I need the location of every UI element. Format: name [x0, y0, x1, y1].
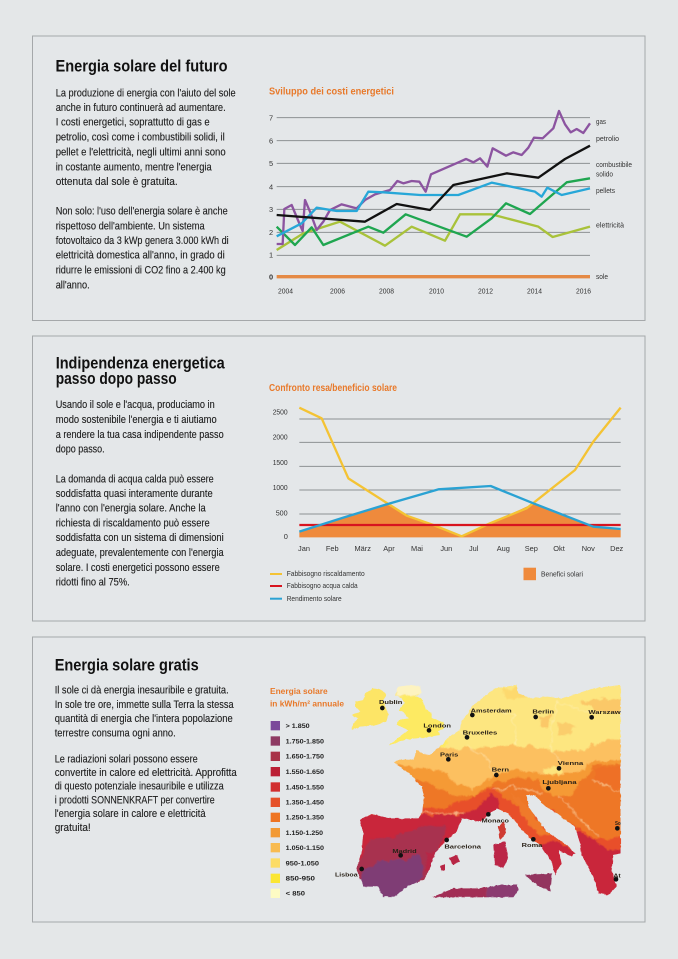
heading: indipendenza energetica: passo dopo passo [56, 369, 177, 388]
text block: costi energetici: all'anno. [56, 279, 90, 291]
x axis labels: Mai [411, 544, 423, 553]
city labels: Madrid [392, 849, 417, 855]
x axis labels: 2004 [278, 286, 293, 296]
text block: acqua calda e riscaldamento: dopo passo. [56, 444, 105, 456]
legend labels: 1.350-1.450 [286, 800, 325, 807]
legend labels: 1.050-1.150 [286, 845, 325, 852]
y axis labels: 7 [269, 114, 273, 122]
x axis labels: Dez [610, 544, 624, 553]
x axis labels: Apr [383, 544, 395, 553]
text block: acqua calda e riscaldamento: a rendere la tua casa indipendente passo [56, 429, 224, 441]
city labels: Paris [440, 752, 458, 758]
legend: Benefici solari [541, 570, 583, 578]
city labels: London [423, 723, 452, 729]
text block: costi energetici: in costante aumento, mentre l'energia [56, 161, 212, 173]
city labels: Warszaw [588, 710, 621, 716]
series: gas [277, 111, 590, 244]
series: petrolio [277, 146, 590, 222]
series labels: gas [596, 117, 606, 126]
legend labels: 1.250-1.350 [286, 815, 325, 822]
legend: Fabbisogno acqua calda [287, 581, 358, 590]
legend title [270, 686, 344, 709]
y axis labels: 1 [269, 250, 273, 260]
city labels: Bruxelles [463, 730, 497, 736]
text block: acqua calda e riscaldamento: solare. I costi energetici possono essere [56, 562, 220, 574]
text block: acqua calda e riscaldamento: adeguate, prevalentemente con l'energia [56, 547, 224, 559]
panel: energia solare gratis [32, 637, 645, 922]
legend labels: 1.450-1.550 [286, 784, 325, 791]
x axis labels: März [354, 544, 371, 553]
legend labels: 850-950 [286, 876, 316, 883]
text block: costi energetici: ottenuta dal sole è gratuita. [56, 176, 178, 188]
text block: energia inesauribile: terrestre consuma ogni anno. [55, 727, 176, 739]
text block: energia inesauribile: i prodotti SONNENKRAFT per convertire [55, 794, 215, 806]
text block: costi energetici: ridurre le emissioni di CO2 fino a 2.400 kg [56, 265, 226, 277]
x axis labels: Jan [298, 544, 310, 553]
city labels: Berlin [532, 709, 555, 715]
city labels: Lisboa [335, 872, 359, 878]
text block: costi energetici: Non solo: l'uso dell'energia solare è anche [56, 206, 228, 218]
y axis labels: 2000 [273, 432, 288, 442]
text block: costi energetici: pellet e l'elettricità, negli ultimi anni sono [56, 146, 226, 158]
x axis labels [278, 286, 591, 296]
text block: energia inesauribile: quantità di energia che l'intera popolazione [55, 713, 233, 725]
text block: costi energetici: petrolio, così come i combustibili solidi, il [56, 131, 225, 143]
y axis labels [269, 114, 273, 282]
x axis labels: Jul [469, 544, 479, 553]
y axis labels: 3 [269, 205, 273, 214]
y axis labels: 6 [269, 136, 273, 146]
series: pellets [277, 183, 590, 236]
text block: energia inesauribile: convertite in calore ed elettricità. Approfitta [55, 767, 237, 779]
x axis labels: Aug [497, 544, 510, 553]
chart title: confronto resa/beneficio solare: Confronto resa/beneficio solare [269, 382, 397, 394]
legend labels [286, 723, 325, 898]
text block: acqua calda e riscaldamento: modo sostenibile l'energia e ti aiutiamo [56, 414, 217, 426]
series labels: sole [596, 272, 608, 281]
legend labels: 1.150-1.250 [286, 830, 324, 837]
text block: costi energetici: anche in futuro continuerà ad aumentare. [56, 102, 226, 114]
x axis labels [298, 544, 624, 553]
y axis labels: 0 [269, 272, 273, 282]
text block: costi energetici: rispettoso dell'ambiente. Un sistema [56, 220, 205, 232]
legend: Fabbisogno riscaldamento [287, 569, 365, 578]
legend labels: 1.650-1.750 [286, 754, 325, 761]
city labels: Amsterdam [471, 708, 512, 714]
text block: acqua calda e riscaldamento [56, 399, 224, 589]
legend swatches [271, 721, 280, 898]
series labels: combustibile [596, 160, 632, 169]
x axis labels: Feb [326, 544, 339, 553]
heading: indipendenza energetica [56, 353, 225, 388]
legend: Rendimento solare [287, 594, 342, 603]
legend labels: 1.550-1.650 [286, 769, 325, 776]
legend labels: 1.750-1.850 [286, 738, 325, 745]
y axis labels: 2 [269, 228, 273, 237]
x axis labels: 2014 [527, 286, 542, 296]
y axis labels: 4 [269, 182, 273, 192]
series labels: solido [596, 170, 613, 178]
map legend [270, 686, 344, 898]
text block: acqua calda e riscaldamento: l'anno con l'energia solare. Anche la [56, 503, 206, 515]
legend title: in kWh/m² annuale [270, 699, 344, 709]
y axis labels: 1500 [273, 458, 288, 467]
series: fabbisogno acqua calda [299, 521, 621, 528]
city labels: Dublin [379, 700, 403, 706]
x axis labels: Okt [553, 544, 565, 553]
text block: acqua calda e riscaldamento: soddisfatta quasi interamente durante [56, 488, 213, 500]
y axis labels: 5 [269, 159, 273, 168]
series labels: petrolio [596, 134, 619, 143]
text block: costi energetici [56, 87, 236, 291]
legend labels: > 1.850 [286, 723, 310, 730]
city labels: Roma [522, 843, 543, 849]
text block: energia inesauribile: gratuita! [55, 822, 91, 834]
text block: energia inesauribile: Il sole ci dà energia inesauribile e gratuita. [55, 685, 229, 697]
y axis labels [273, 408, 288, 541]
text block: acqua calda e riscaldamento: Usando il sole e l'acqua, produciamo in [56, 399, 215, 411]
city labels [335, 700, 621, 882]
heading: energia solare del futuro: Energia solare del futuro [56, 56, 228, 76]
text block: energia inesauribile: In sole tre ore, immette sulla Terra la stessa [55, 699, 234, 711]
x axis labels: 2016 [576, 286, 591, 296]
series: elettricità [277, 214, 590, 250]
city labels: At [613, 873, 621, 879]
city labels: Bern [492, 768, 510, 774]
line chart: confronto resa/beneficio [270, 408, 624, 603]
text block: energia inesauribile: l'energia solare in calore e elettricità [55, 808, 206, 820]
city labels: Barcelona [444, 844, 482, 850]
series labels: pellets [596, 186, 615, 195]
city labels: Monaco [482, 818, 510, 824]
legend labels: 950-1.050 [286, 860, 320, 867]
text block: costi energetici: I costi energetici, soprattutto di gas e [56, 117, 210, 129]
series labels [596, 117, 632, 281]
area: benefici solari [299, 503, 621, 537]
x axis labels: Sep [525, 544, 538, 553]
text block: costi energetici: elettricità domestica all'anno, in grado di [56, 250, 225, 262]
text block: acqua calda e riscaldamento: La domanda di acqua calda può essere [56, 473, 214, 485]
text block: costi energetici: fotovoltaico da 3 kWp genera 3.000 kWh di [56, 235, 229, 247]
legend title: Energia solare [270, 686, 328, 696]
text block: acqua calda e riscaldamento: soddisfatta con un sistema di dimensioni [56, 532, 224, 544]
city labels: So [615, 821, 621, 827]
y axis labels: 2500 [273, 408, 288, 416]
map: europe solar irradiation [335, 677, 627, 907]
legend labels: < 850 [286, 891, 306, 898]
text block: acqua calda e riscaldamento: ridotti fino al 75%. [56, 577, 130, 589]
heading: energia solare gratis: Energia solare gratis [55, 656, 199, 675]
y axis labels: 1000 [273, 483, 288, 492]
x axis labels: 2012 [478, 286, 493, 296]
y axis labels: 0 [284, 532, 288, 541]
panel: indipendenza energetica [32, 336, 645, 621]
legend [270, 568, 583, 603]
x axis labels: 2006 [330, 286, 345, 296]
series: combustibile solido [277, 178, 590, 245]
city labels: Ljubljana [542, 780, 578, 786]
series labels: elettricità [596, 220, 625, 230]
y axis labels: 500 [276, 508, 288, 518]
x axis labels: Nov [582, 544, 595, 553]
chart title: sviluppo dei costi energetici: Sviluppo dei costi energetici [269, 86, 394, 98]
series: sole [277, 272, 590, 282]
city labels: Vienna [558, 761, 585, 767]
series: fabbisogno riscaldamento [299, 408, 621, 536]
text block: acqua calda e riscaldamento: richiesta di riscaldamento può essere [56, 517, 210, 529]
x axis labels: 2008 [379, 286, 394, 296]
x axis labels: 2010 [429, 286, 444, 296]
heading: indipendenza energetica: Indipendenza energetica [56, 353, 225, 372]
text block: energia inesauribile: Le radiazioni solari possono essere [55, 754, 198, 766]
text block: energia inesauribile: di questo potenziale inesauribile e utilizza [55, 780, 224, 792]
line chart: costi energetici [269, 111, 632, 296]
panel: energia solare del futuro [32, 36, 645, 320]
series: rendimento solare [299, 486, 621, 532]
text block: costi energetici: La produzione di energia con l'aiuto del sole [56, 87, 236, 99]
text block: energia inesauribile [55, 685, 237, 834]
x axis labels: Jun [440, 544, 452, 553]
